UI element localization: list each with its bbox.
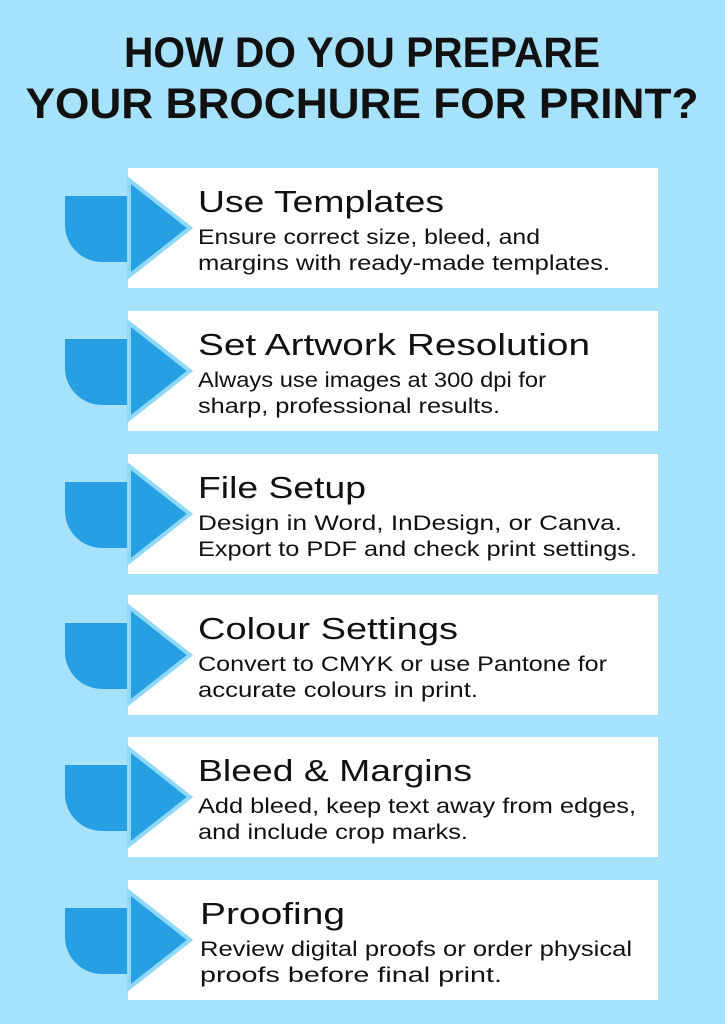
text block	[198, 653, 607, 702]
icon: arrow	[65, 892, 190, 988]
panel: proofing	[65, 880, 658, 1000]
text block: Convert to CMYK or use Pantone for	[198, 653, 607, 676]
heading: Bleed & Margins	[198, 753, 472, 788]
text block: and include crop marks.	[198, 821, 468, 844]
text block	[198, 226, 610, 275]
icon: arrow	[65, 607, 190, 703]
title: HOW DO YOU PREPARE	[124, 29, 600, 77]
panel: use templates	[65, 168, 658, 288]
icon: arrow	[65, 466, 190, 562]
text block: Ensure correct size, bleed, and	[198, 226, 540, 249]
text block	[198, 512, 637, 561]
icon: arrow	[65, 323, 190, 419]
text block	[200, 938, 632, 987]
heading: Use Templates	[198, 184, 444, 219]
heading: Colour Settings	[198, 611, 458, 646]
text block: margins with ready-made templates.	[198, 252, 610, 275]
text block: proofs before final print.	[200, 964, 502, 987]
title	[26, 29, 699, 128]
text block: Export to PDF and check print settings.	[198, 538, 637, 561]
text block: Design in Word, InDesign, or Canva.	[198, 512, 622, 535]
text block: Add bleed, keep text away from edges,	[198, 795, 636, 818]
panel: bleed and margins	[65, 737, 658, 857]
text block: sharp, professional results.	[198, 395, 500, 418]
text block	[198, 369, 546, 418]
heading: Proofing	[200, 896, 345, 931]
panel: file setup	[65, 454, 658, 574]
panel: colour settings	[65, 595, 658, 715]
heading: File Setup	[198, 470, 366, 505]
panel: artwork resolution	[65, 311, 658, 431]
text block: accurate colours in print.	[198, 679, 478, 702]
icon: arrow	[65, 180, 190, 276]
title: YOUR BROCHURE FOR PRINT?	[26, 80, 699, 128]
icon: arrow	[65, 749, 190, 845]
text block	[198, 795, 636, 844]
heading: Set Artwork Resolution	[198, 327, 590, 362]
text block: Review digital proofs or order physical	[200, 938, 632, 961]
text block: Always use images at 300 dpi for	[198, 369, 546, 392]
